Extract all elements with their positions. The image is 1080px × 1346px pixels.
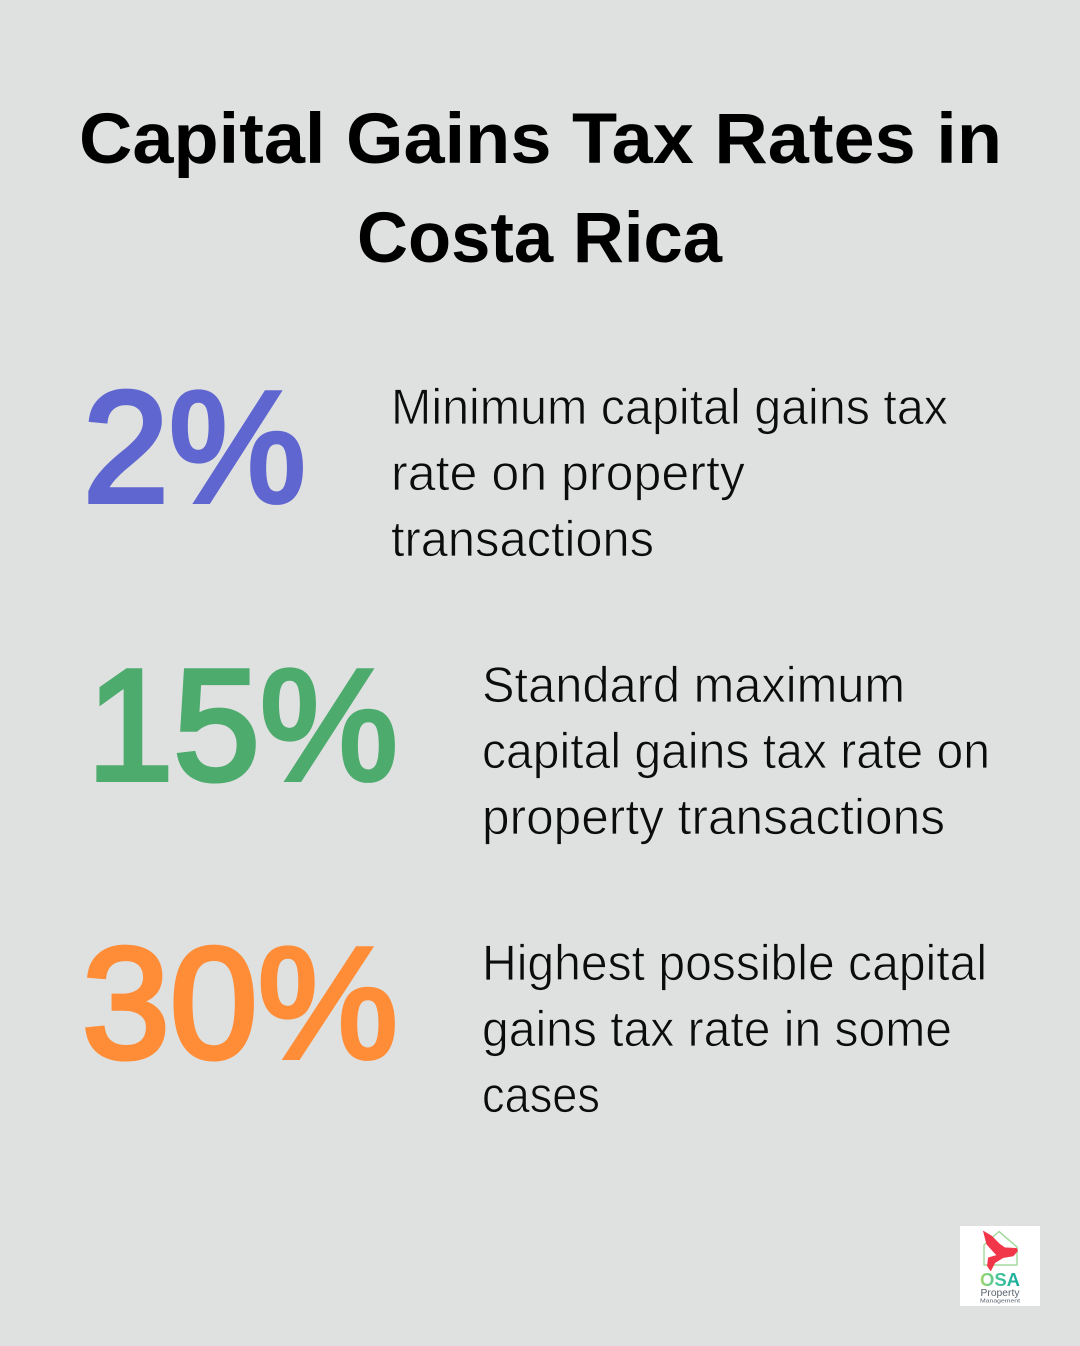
- description: highest rate: [482, 935, 987, 1123]
- number: 15%: 15%: [87, 638, 398, 814]
- description: minimum rate: rate on property: [391, 445, 745, 501]
- logo text: Management: Management: [980, 1298, 1021, 1304]
- description: standard maximum rate: [482, 657, 990, 845]
- icon: red bird: [983, 1231, 1018, 1271]
- description: minimum rate: [391, 379, 948, 567]
- logo text: Property: Property: [980, 1287, 1020, 1299]
- description: standard maximum rate: Standard maximum: [482, 657, 905, 713]
- icon: house outline: [984, 1232, 1017, 1265]
- description: highest rate: gains tax rate in some: [482, 1001, 952, 1057]
- title: Capital Gains Tax Rates in: [79, 100, 1002, 179]
- stat row: 30%: [82, 916, 987, 1123]
- logo: OSA Property Management: [960, 1226, 1040, 1306]
- stat row: 15%: [87, 638, 990, 845]
- description: minimum rate: transactions: [391, 511, 654, 567]
- description: minimum rate: Minimum capital gains tax: [391, 379, 948, 435]
- logo wordmark: OSA: OSA: [980, 1270, 1020, 1290]
- description: standard maximum rate: capital gains tax rate on: [482, 723, 990, 779]
- number: 30%: 30%: [82, 916, 398, 1092]
- title: [79, 100, 1002, 278]
- description: standard maximum rate: property transactions: [482, 789, 945, 845]
- title: Costa Rica: [357, 199, 723, 278]
- stat row: 2%: [83, 360, 948, 567]
- number: 2%: 2%: [83, 360, 306, 536]
- description: highest rate: cases: [482, 1067, 600, 1123]
- description: highest rate: Highest possible capital: [482, 935, 987, 991]
